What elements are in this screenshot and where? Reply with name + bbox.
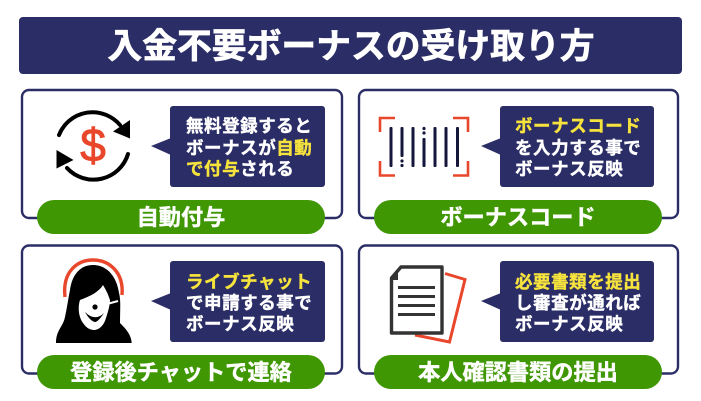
label pill: 登録後チャットで連絡 <box>70 360 292 385</box>
speech bubble <box>481 261 654 342</box>
label pill <box>37 200 325 234</box>
title banner <box>19 17 682 74</box>
panel: ボーナスコード <box>359 90 678 234</box>
panel: 本人確認書類の提出 <box>359 246 678 389</box>
panel: 自動付与 <box>22 90 342 234</box>
icon: documents <box>391 267 465 342</box>
speech bubble: を入力する事で <box>515 138 641 158</box>
panel: 登録後チャットで連絡 <box>22 246 342 389</box>
title banner: 入金不要ボーナスの受け取り方 <box>107 27 595 66</box>
label pill <box>374 355 662 389</box>
speech bubble: ライブチャット <box>186 272 312 292</box>
speech bubble: ボーナス反映 <box>515 159 623 179</box>
icon: operator with headset <box>56 260 132 343</box>
icon: dollar with circular arrows <box>56 112 130 180</box>
speech bubble: ボーナスコード <box>515 116 641 136</box>
icon: barcode <box>380 118 468 176</box>
label pill <box>37 355 325 389</box>
speech bubble: で付与される <box>186 159 294 179</box>
speech bubble: ボーナスが自動 <box>186 138 312 158</box>
label pill: 自動付与 <box>137 205 225 230</box>
speech bubble <box>481 106 654 187</box>
label pill: 本人確認書類の提出 <box>418 360 618 385</box>
speech bubble <box>151 106 325 187</box>
speech bubble: 必要書類を提出 <box>515 272 641 292</box>
speech bubble: し審査が通れば <box>515 293 641 313</box>
label pill: ボーナスコード <box>440 205 596 230</box>
speech bubble: で申請する事で <box>186 293 312 313</box>
speech bubble: 無料登録すると <box>186 116 312 136</box>
speech bubble: ボーナス反映 <box>186 314 294 334</box>
speech bubble <box>151 261 325 342</box>
speech bubble: ボーナス反映 <box>515 314 623 334</box>
label pill <box>374 200 662 234</box>
icon: dollar with circular arrows: $ <box>80 119 106 171</box>
